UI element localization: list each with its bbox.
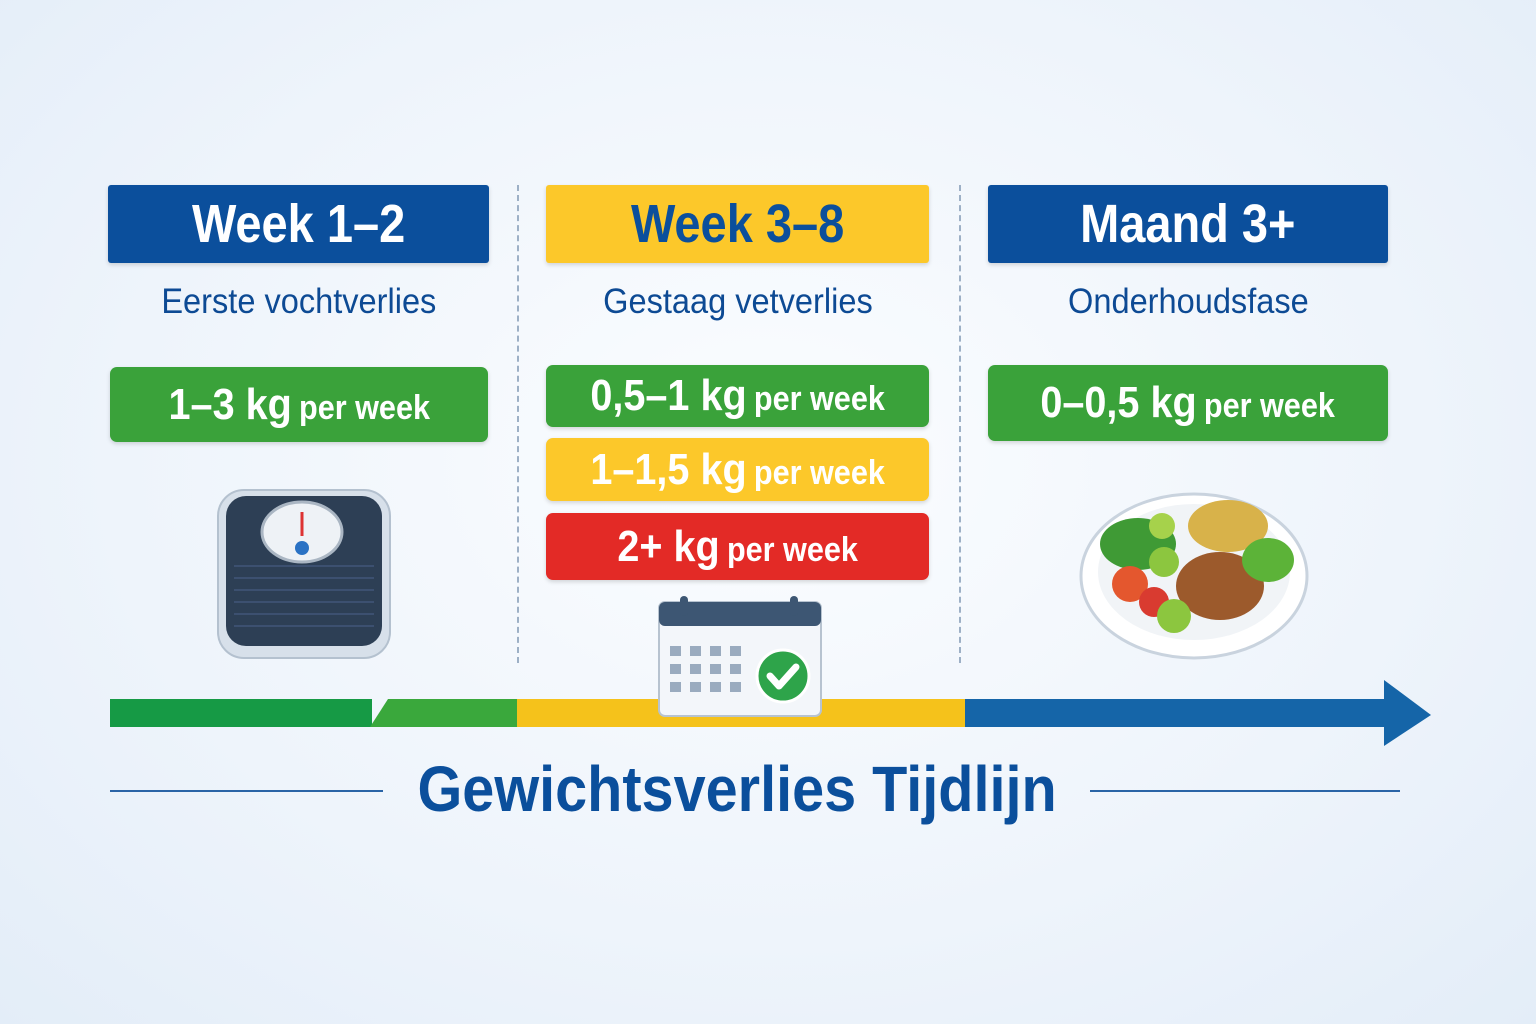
pill: 0,5-1 kg: 0,5–1 kgper week (590, 371, 885, 420)
pill: 1-1,5 kg (546, 438, 929, 501)
header: Week 1-2 (108, 185, 489, 263)
header: Week 3-8: Week 3–8 (631, 194, 844, 254)
pill: 0-0,5 kg (988, 365, 1388, 441)
subtitle: Gestaag vetverlies: Gestaag vetverlies (603, 282, 872, 321)
header: Maand 3+ (988, 185, 1388, 263)
header: Week 1-2: Week 1–2 (192, 194, 405, 254)
pill: 1-1,5 kg: 1–1,5 kgper week (590, 444, 885, 494)
pill: 1-3 kg: 1–3 kgper week (168, 380, 430, 428)
title: Gewichtsverlies Tijdlijn: Gewichtsverlies Tijdlijn (418, 753, 1057, 825)
icon: scale (217, 489, 391, 659)
icon: plate of food (1080, 492, 1308, 660)
pill: 2+ kg (546, 513, 929, 580)
subtitle: Onderhoudsfase: Onderhoudsfase (1068, 282, 1308, 321)
subtitle: Eerste vochtverlies: Eerste vochtverlies (161, 282, 436, 321)
header: Maand 3+: Maand 3+ (1080, 194, 1296, 254)
pill: 0,5-1 kg (546, 365, 929, 427)
icon: calendar (658, 596, 822, 717)
pill: 1-3 kg (110, 367, 488, 442)
pill: 0-0,5 kg: 0–0,5 kgper week (1041, 378, 1335, 427)
header: Week 3-8 (546, 185, 929, 263)
timeline bar with arrow (110, 680, 1431, 746)
pill: 2+ kg: 2+ kgper week (617, 522, 858, 570)
